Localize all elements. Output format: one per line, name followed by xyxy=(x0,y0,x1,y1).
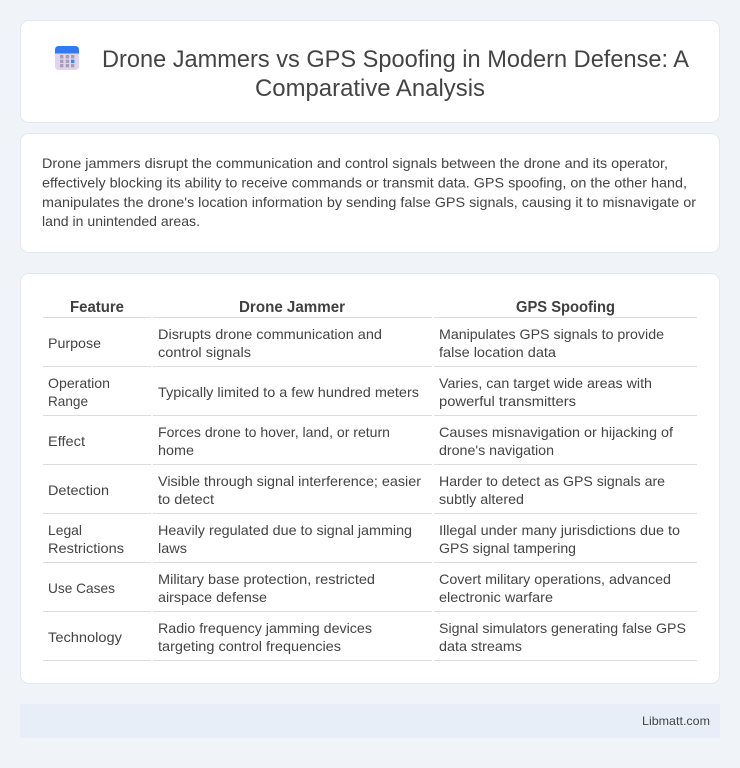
row: legal restrictions: Heavily regulated due to signal jamming xyxy=(158,522,412,538)
row: detection: subtly altered xyxy=(439,491,524,507)
row: legal restrictions: Restrictions xyxy=(48,540,124,556)
row: detection: Harder to detect as GPS signals are xyxy=(439,473,665,489)
panel: intro text card xyxy=(20,134,720,252)
row: legal restrictions: Illegal under many jurisdictions due to xyxy=(439,522,680,538)
row: purpose: false location data xyxy=(439,344,556,360)
row: legal restrictions: laws xyxy=(158,540,187,556)
row: technology xyxy=(48,620,686,654)
row: use cases xyxy=(48,571,671,605)
row: technology: data streams xyxy=(439,638,522,654)
row: operation range: Typically limited to a few hundred meters xyxy=(158,384,419,400)
row: effect: drone's navigation xyxy=(439,442,554,458)
row: legal restrictions: GPS signal tampering xyxy=(439,540,576,556)
row: detection: Detection xyxy=(48,482,109,498)
row: legal restrictions: Legal xyxy=(48,522,82,538)
row: use cases: Military base protection, restricted xyxy=(158,571,375,587)
table header xyxy=(70,299,615,316)
intro paragraph: manipulates the drone's location information by sending false GPS signals, causing it to misnavigate or xyxy=(42,194,696,210)
row: operation range: Range xyxy=(48,393,88,409)
footer xyxy=(20,704,720,738)
row: use cases: Use Cases xyxy=(48,580,115,596)
row: use cases: airspace defense xyxy=(158,589,267,605)
row: detection: to detect xyxy=(158,491,214,507)
intro paragraph: land in unintended areas. xyxy=(42,213,200,229)
row: detection xyxy=(48,473,665,507)
intro paragraph: Drone jammers disrupt the communication and control signals between the drone and its operator, xyxy=(42,155,668,171)
row: operation range: Operation xyxy=(48,375,110,391)
table header: Drone Jammer xyxy=(239,299,345,316)
row: effect: Causes misnavigation or hijacking of xyxy=(439,424,673,440)
row: use cases: Covert military operations, advanced xyxy=(439,571,671,587)
footer: Libmatt.com xyxy=(642,714,710,728)
row: purpose: Purpose xyxy=(48,335,101,351)
title: Drone Jammers vs GPS Spoofing in Modern Defense: A xyxy=(102,46,689,73)
panel: title card xyxy=(20,20,720,122)
intro paragraph xyxy=(42,155,696,229)
table header: GPS Spoofing xyxy=(516,299,615,316)
title xyxy=(102,46,689,102)
row: effect xyxy=(48,424,673,458)
row: legal restrictions xyxy=(48,522,680,556)
row: purpose: Manipulates GPS signals to provide xyxy=(439,326,664,342)
title: Comparative Analysis xyxy=(255,75,485,102)
row: technology: Radio frequency jamming devices xyxy=(158,620,372,636)
row: purpose: Disrupts drone communication and xyxy=(158,326,382,342)
row: effect: Forces drone to hover, land, or return xyxy=(158,424,390,440)
icon: calendar xyxy=(55,46,79,70)
row: effect: home xyxy=(158,442,194,458)
row: technology: Technology xyxy=(48,629,122,645)
row: operation range xyxy=(48,375,652,409)
row: operation range: Varies, can target wide areas with xyxy=(439,375,652,391)
row: technology: targeting control frequencies xyxy=(158,638,341,654)
intro paragraph: effectively blocking its ability to receive commands or transmit data. GPS spoofing, on the other hand, xyxy=(42,174,687,190)
table header: Feature xyxy=(70,299,124,316)
row: use cases: electronic warfare xyxy=(439,589,553,605)
row: purpose: control signals xyxy=(158,344,251,360)
row: effect: Effect xyxy=(48,433,85,449)
row: technology: Signal simulators generating false GPS xyxy=(439,620,686,636)
row: detection: Visible through signal interference; easier xyxy=(158,473,421,489)
row: operation range: powerful transmitters xyxy=(439,393,576,409)
row: purpose xyxy=(48,326,664,360)
panel: comparison table card xyxy=(20,274,720,684)
